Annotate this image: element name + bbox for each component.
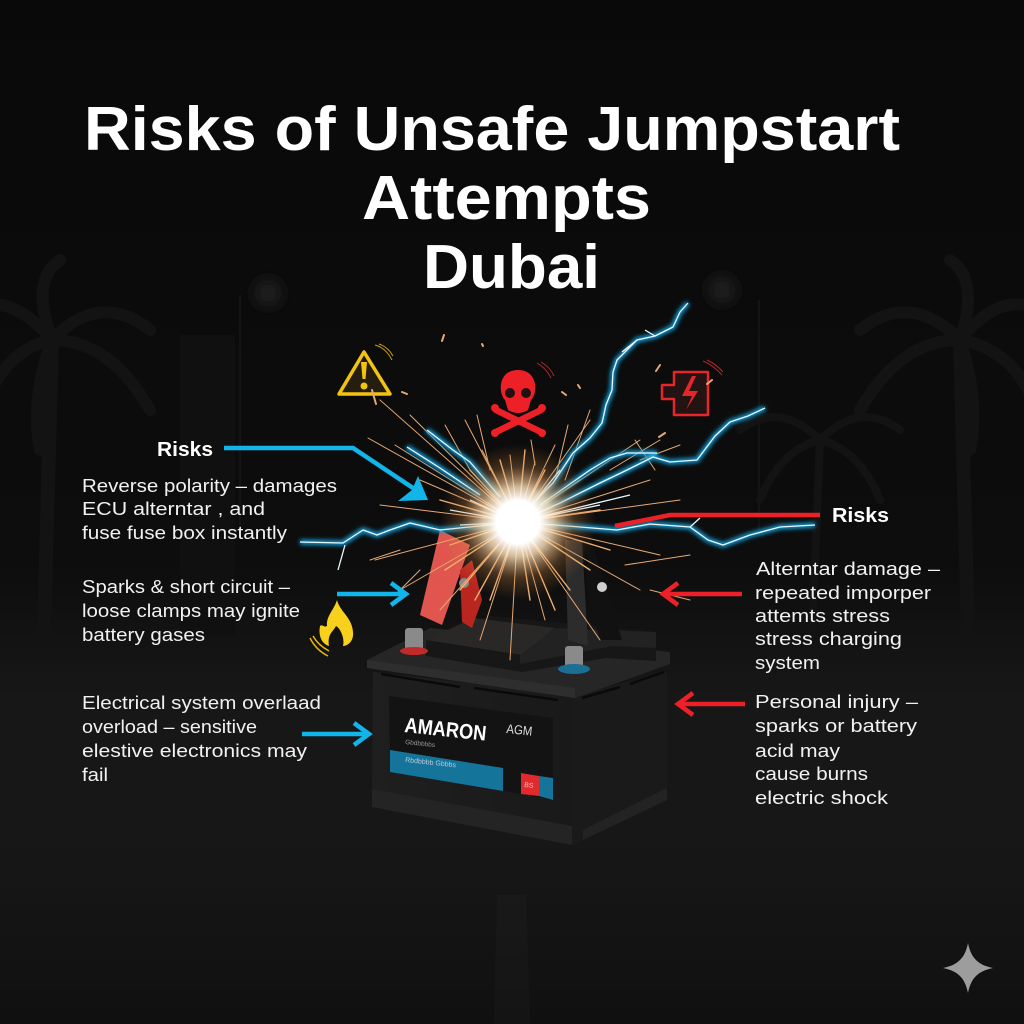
text: sparks and short circuit [82, 576, 300, 645]
text: reverse polarity: ECU alterntar , and [82, 498, 265, 519]
title [84, 95, 900, 302]
palm silhouette left [0, 260, 150, 630]
arrow: top left blue [224, 448, 428, 501]
battery label panel [389, 696, 553, 800]
arrow: lower right red [678, 693, 745, 715]
title: Risks of Unsafe Jumpstart [84, 95, 900, 164]
icon: battery with bolt [662, 360, 723, 415]
battery [367, 616, 670, 845]
text: alternator damage: stress charging [755, 628, 902, 649]
arrow: middle left blue [337, 583, 406, 605]
black clamp [565, 530, 622, 646]
left heading: Risks: Risks [157, 439, 213, 461]
battery brand text: AMARON [403, 714, 487, 746]
text: personal injury [755, 691, 919, 808]
arrow: lower left blue [302, 723, 369, 745]
battery brand text: AGM [506, 721, 533, 739]
lightning glow [300, 303, 815, 545]
lightning bolts [300, 303, 815, 570]
text: electrical overload [82, 692, 321, 785]
battery terminal posts [405, 628, 423, 650]
text: alternator damage: attemts stress [755, 605, 890, 626]
icon: warning triangle [339, 344, 393, 394]
arrow: top right red [615, 515, 820, 526]
battery brand text: Rbdbbbb Gbbbs [405, 757, 457, 769]
text: sparks and short circuit: battery gases [82, 624, 205, 645]
battery brand text [403, 714, 534, 790]
text: sparks and short circuit: Sparks & short circuit – [82, 576, 291, 597]
spark burst [368, 335, 712, 660]
arrow: middle right red [663, 583, 742, 605]
text: electrical overload: Electrical system overlaad [82, 692, 321, 713]
text: electrical overload: overload – sensitive [82, 716, 257, 737]
icon: sparkle watermark [943, 943, 993, 993]
title: Attempts [362, 164, 651, 233]
text: alternator damage: Alterntar damage – [756, 558, 941, 579]
right heading: Risks: Risks [832, 505, 889, 527]
icon: skull and crossbones [491, 362, 554, 437]
text: personal injury: Personal injury – [755, 691, 919, 712]
battery top cover [426, 616, 656, 672]
text: electrical overload: fail [82, 764, 108, 785]
icon: flame [310, 600, 353, 656]
palm silhouette right [740, 260, 1024, 640]
text: alternator damage: repeated imporper [755, 582, 931, 603]
red clamp [420, 530, 482, 628]
spark core [440, 444, 596, 600]
text: personal injury: cause burns [755, 763, 868, 784]
text: alternator damage: system [755, 652, 820, 673]
text: sparks and short circuit: loose clamps may ignite [82, 600, 300, 621]
text: personal injury: electric shock [755, 787, 889, 808]
battery brand text: BS [524, 782, 534, 790]
battery brand text: Gbdbbbbs [405, 739, 436, 749]
text: reverse polarity [82, 475, 337, 543]
text: personal injury: sparks or battery [755, 715, 918, 736]
text: electrical overload: elestive electronics may [82, 740, 308, 761]
text: reverse polarity: Reverse polarity – damages [82, 475, 337, 496]
text: reverse polarity: fuse fuse box instantly [82, 522, 288, 543]
text: alternator damage [755, 558, 941, 673]
title: Dubai [423, 233, 600, 302]
text: personal injury: acid may [755, 740, 841, 761]
